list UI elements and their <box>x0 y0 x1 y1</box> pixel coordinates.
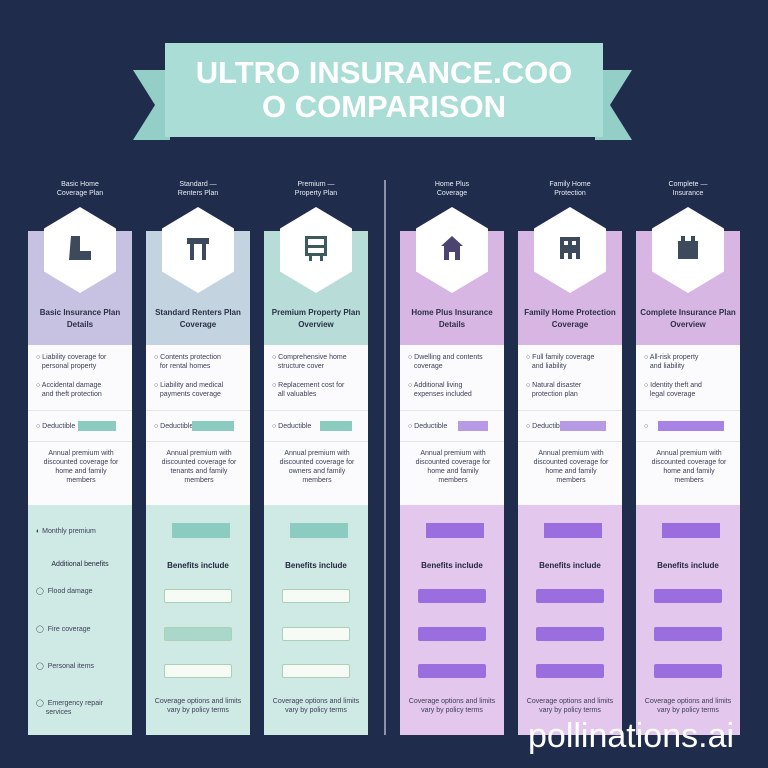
panel: column 2: Coverage <box>180 320 216 329</box>
panel: column 2: payments coverage <box>160 391 221 398</box>
panel: column 1: Additional benefits <box>51 561 109 568</box>
panel: column 5: Coverage options and limits <box>527 698 613 705</box>
panel: column 4: Annual premium with <box>420 450 486 457</box>
panel: column 2: Coverage options and limits <box>155 698 241 705</box>
panel: column 4: ○ Dwelling and contents <box>408 354 483 361</box>
divider line <box>384 180 386 735</box>
panel: column 3: ○ Replacement cost for <box>272 382 344 389</box>
panel: column 2 <box>146 207 250 735</box>
panel: column 5: and liability <box>532 363 566 370</box>
panel: column 6 <box>636 207 740 735</box>
panel: column 5: ○ Full family coverage <box>526 354 594 361</box>
panel: column 1: services <box>46 709 71 716</box>
panel: column 4: home and family <box>427 468 479 475</box>
panel: column 1: personal property <box>42 363 96 370</box>
panel: column 1: home and family <box>55 468 107 475</box>
panel: column 3: Annual premium with <box>284 450 350 457</box>
panel: column 5: Coverage <box>552 320 588 329</box>
column labels: Coverage Plan <box>57 190 103 197</box>
panel: column 4: vary by policy terms <box>421 707 483 714</box>
panel: column 1: discounted coverage for <box>44 459 118 466</box>
column labels: Premium — <box>298 181 334 188</box>
panel: column 6: Complete Insurance Plan <box>640 308 736 317</box>
column labels: Basic Home <box>61 181 99 188</box>
panel: column 1: ○ Deductible <box>36 423 75 430</box>
panel: column 3: vary by policy terms <box>285 707 347 714</box>
icon: table <box>162 207 234 293</box>
column labels: Protection <box>554 190 586 197</box>
column labels: Insurance <box>673 190 703 197</box>
column labels <box>57 180 708 197</box>
panel: column 1: ○ Liability coverage for <box>36 354 106 361</box>
panel: column 6: and liability <box>650 363 684 370</box>
panel: column 6: Annual premium with <box>656 450 722 457</box>
icon: chair <box>44 207 116 293</box>
panel: column 5: vary by policy terms <box>539 707 601 714</box>
panel: column 6: home and family <box>663 468 715 475</box>
column labels: Family Home <box>549 181 591 188</box>
panel: column 3: Overview <box>298 320 334 329</box>
panel: column 5: Benefits include <box>539 561 601 570</box>
panel: column 6: discounted coverage for <box>652 459 726 466</box>
panel: column 6: members <box>674 477 704 484</box>
column labels: Property Plan <box>295 190 337 197</box>
panel: column 1: members <box>66 477 96 484</box>
panel: column 4: ○ Deductible <box>408 423 447 430</box>
title banner: ULTRO INSURANCE.COO <box>196 55 572 90</box>
column labels: Renters Plan <box>178 190 218 197</box>
panel: column 1: and theft protection <box>42 391 102 398</box>
panel: column 4: expenses included <box>414 391 472 398</box>
panel: column 1: Basic Insurance Plan <box>40 308 120 317</box>
panel: column 1: ◯ Personal items <box>36 663 94 670</box>
panel: column 6: legal coverage <box>650 391 695 398</box>
panel: column 3: discounted coverage for <box>280 459 354 466</box>
panel: column 5 <box>518 207 622 735</box>
panel: column 1: Annual premium with <box>48 450 114 457</box>
column labels: Standard — <box>179 181 217 188</box>
panel: column 6: Coverage options and limits <box>645 698 731 705</box>
panel: column 2: Benefits include <box>167 561 229 570</box>
panel: column 5: ○ Deductible <box>526 423 565 430</box>
panel: column 3: Premium Property Plan <box>272 308 360 317</box>
panel: column 6: ○ <box>644 423 648 430</box>
panel: column 4: Home Plus Insurance <box>411 308 493 317</box>
column labels: Complete — <box>669 181 707 188</box>
panel: column 6: Benefits include <box>657 561 719 570</box>
panel: column 2: discounted coverage for <box>162 459 236 466</box>
panel: column 3: owners and family <box>289 468 345 475</box>
panel: column 3: structure cover <box>278 363 324 370</box>
panel: column 2: ○ Deductible <box>154 423 193 430</box>
column labels: Coverage <box>437 190 467 197</box>
panel: column 1: ◯ Fire coverage <box>36 626 91 633</box>
panel: column 5: ○ Natural disaster <box>526 382 581 389</box>
panel: column 4: Coverage options and limits <box>409 698 495 705</box>
icon: building <box>534 207 606 293</box>
panel: column 4: Details <box>439 320 465 329</box>
panel: column 3: Benefits include <box>285 561 347 570</box>
panel: column 2: ○ Liability and medical <box>154 382 223 389</box>
panel: column 3: Coverage options and limits <box>273 698 359 705</box>
panel: column 2: ○ Contents protection <box>154 354 221 361</box>
panel: column 1: ○ Accidental damage <box>36 382 101 389</box>
panel: column 1: Details <box>67 320 93 329</box>
panel: column 3: members <box>302 477 332 484</box>
panel: column 5: Family Home Protection <box>524 308 616 317</box>
panel: column 5: members <box>556 477 586 484</box>
panel: column 4: Benefits include <box>421 561 483 570</box>
panel: column 1: ◐ Monthly premium <box>36 528 96 535</box>
title banner: O COMPARISON <box>262 89 506 124</box>
icon: box <box>652 207 724 293</box>
panel: column 5: Annual premium with <box>538 450 604 457</box>
panel: column 3 <box>264 207 368 735</box>
icon: house <box>416 207 488 293</box>
panel: column 5: discounted coverage for <box>534 459 608 466</box>
panel: column 1 <box>28 207 132 735</box>
column labels: Home Plus <box>435 181 469 188</box>
panel: column 4: discounted coverage for <box>416 459 490 466</box>
panel: column 6: ○ Identity theft and <box>644 382 702 389</box>
panel: column 4: members <box>438 477 468 484</box>
panel: column 2: tenants and family <box>171 468 227 475</box>
panel: column 6: ○ All-risk property <box>644 354 698 361</box>
panel: column 1: ◯ Emergency repair <box>36 700 103 707</box>
panel: column 2: for rental homes <box>160 363 210 370</box>
panel: column 3: ○ Deductible <box>272 423 311 430</box>
panel: column 2: vary by policy terms <box>167 707 229 714</box>
panel: column 3: ○ Comprehensive home <box>272 354 347 361</box>
panel: column 2: members <box>184 477 214 484</box>
panel: column 2: Annual premium with <box>166 450 232 457</box>
panel: column 6: vary by policy terms <box>657 707 719 714</box>
panel: column 1: ◯ Flood damage <box>36 588 92 595</box>
panel: column 3: all valuables <box>278 391 316 398</box>
title banner <box>133 43 632 140</box>
panel: column 2: Standard Renters Plan <box>155 308 241 317</box>
panel: column 5: protection plan <box>532 391 578 398</box>
panel: column 5: home and family <box>545 468 597 475</box>
panel: column 4: coverage <box>414 363 443 370</box>
watermark: pollinations.ai <box>528 717 734 755</box>
panel: column 6: Overview <box>670 320 706 329</box>
panel: column 4: ○ Additional living <box>408 382 462 389</box>
panel: column 4 <box>400 207 504 735</box>
icon: cabinet <box>280 207 352 293</box>
